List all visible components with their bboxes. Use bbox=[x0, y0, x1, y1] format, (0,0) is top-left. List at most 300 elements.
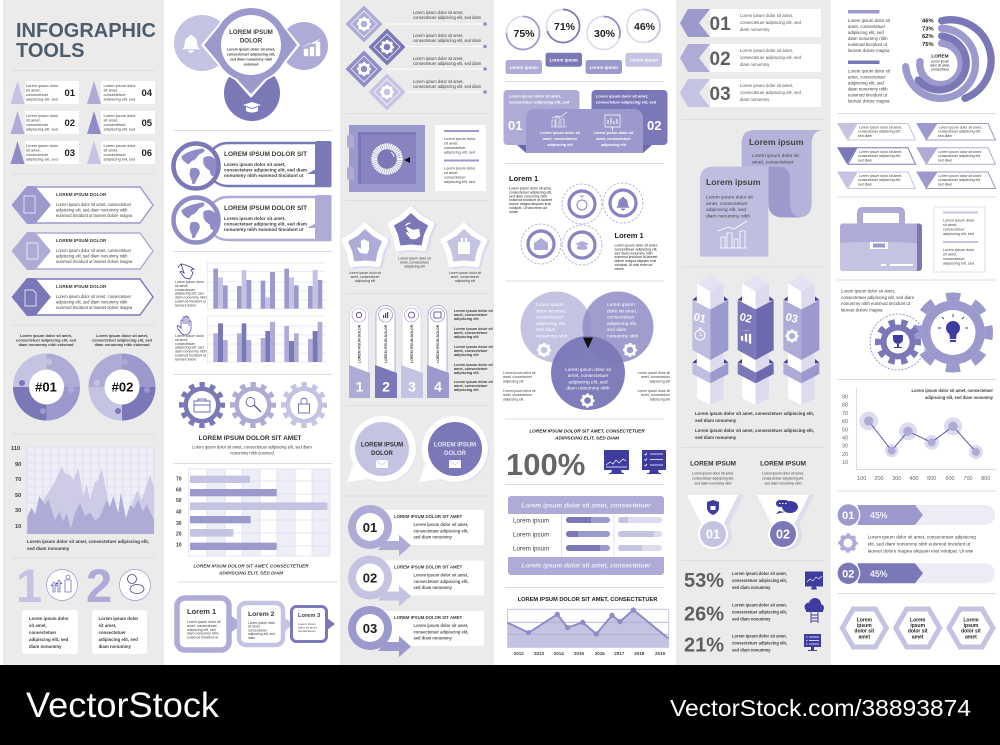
panel: overlapping 01 02 cards: Lorem ipsum dolor sit amet, bbox=[509, 94, 561, 98]
line area chart: 2016 bbox=[595, 651, 605, 656]
panel: dashed icon circles: minim bbox=[509, 210, 518, 214]
globe callout one bbox=[174, 141, 332, 188]
pill four bbox=[427, 306, 449, 398]
panel: three stars: amet, consectetuer bbox=[351, 275, 380, 279]
panel: hexagon arrow list: Lorem ipsum dolor sit amet, consectetuer bbox=[56, 294, 131, 299]
ring arrow 01 bbox=[348, 505, 484, 556]
panel: overlapping 01 02 cards: adipiscing elit bbox=[547, 143, 573, 147]
panel: overlapping 01 02 cards: amet, consectetuer bbox=[543, 137, 578, 141]
panel: angled text tags bbox=[837, 123, 996, 188]
pill four: 4 bbox=[434, 378, 442, 394]
ring arrow 01: consectetuer adipiscing elit, bbox=[414, 528, 469, 533]
panel: hexagon arrow list: euismod tincidunt ut laoreet dolore magna bbox=[56, 259, 133, 264]
panel: isometric columns bbox=[692, 276, 819, 440]
panel: three stars bbox=[344, 209, 487, 283]
text card: Lorem ipsum dolor bbox=[943, 218, 974, 222]
panel: angled text tags: Lorem ipsum dolor sit amet, bbox=[938, 150, 982, 154]
panel: radial bar chart: diam nonummy nibh bbox=[848, 86, 888, 92]
horizontal bar chart: 50 bbox=[176, 498, 182, 504]
panel: hexagon labels bbox=[842, 609, 993, 647]
ring arrow 03: 03 bbox=[363, 621, 377, 636]
panel: three stars: amet, consectetuer bbox=[451, 275, 480, 279]
panel: three circle venn: Lorem ipsum dolor sit bbox=[638, 389, 670, 393]
text card: consectetuer bbox=[943, 257, 965, 261]
ring arrow 03: sed diam nonummy bbox=[414, 636, 453, 641]
panel: three step flow bbox=[177, 598, 335, 650]
panel: hexagon arrow list: LOREM IPSUM DOLOR bbox=[56, 192, 107, 197]
icon: list board bbox=[804, 634, 821, 651]
area chart: sed diam nonummy bbox=[27, 546, 70, 551]
panel: scroll cards: adipiscing elit, sed bbox=[706, 207, 746, 213]
globe callout one: Lorem ipsum dolor sit amet, bbox=[224, 162, 286, 167]
line area chart: 2018 bbox=[634, 651, 645, 656]
text card bbox=[435, 125, 486, 191]
ring arrow 02: sed diam nonummy bbox=[414, 585, 453, 590]
panel: three stars: adipiscing elit bbox=[355, 279, 375, 283]
panel: numbered triangle items: adipiscing elit, sed bbox=[104, 96, 135, 102]
panel: chevron list: Lorem ipsum dolor sit amet, bbox=[740, 13, 793, 18]
ring arrow 01: sed diam nonummy bbox=[414, 535, 453, 540]
panel: angled text tags: sed diam bbox=[858, 158, 872, 162]
progress 02: 02 bbox=[842, 568, 854, 580]
panel: step one and two: 2 bbox=[86, 559, 112, 612]
progress 01: 01 bbox=[842, 510, 854, 522]
panel: angled text tags: consectetuer adipiscing elit, bbox=[938, 130, 981, 134]
panel: percentage statistics: 26% bbox=[684, 604, 724, 626]
panel: four ribbon pills: adipiscing elit bbox=[454, 353, 479, 357]
panel: numbered triangle items: sit amet, bbox=[26, 88, 41, 92]
panel: dashed icon circles: Lorem 1 bbox=[614, 231, 644, 240]
panel: angled text tags: consectetuer adipiscing elit, bbox=[938, 178, 981, 182]
panel: numbered triangle items: Lorem ipsum dolor bbox=[26, 143, 58, 148]
panel: puzzle donuts: consectetuer adipiscing elit, sed bbox=[16, 338, 77, 342]
icon: checklist monitor bbox=[642, 450, 666, 474]
line chart with bubbles: 70 bbox=[842, 411, 848, 417]
panel: three circle venn: adipiscing elit, bbox=[536, 321, 566, 327]
panel: angled text tags: sed diam bbox=[938, 134, 952, 138]
panel: overlapping 01 02 cards: 01 bbox=[508, 118, 522, 133]
panel: isometric columns: 03 bbox=[784, 311, 799, 326]
globe callout one: LOREM IPSUM DOLOR SIT bbox=[224, 151, 307, 158]
panel: overlapping circles: euismod bbox=[244, 62, 258, 66]
panel: numbered triangle items: 03 bbox=[64, 148, 75, 159]
panel: hexagon labels: Lorem bbox=[857, 618, 872, 624]
text card: sit amet, bbox=[444, 142, 458, 146]
panel: three gears: nonummy nibh euismod bbox=[230, 450, 274, 456]
panel: three circle venn: Lorem ipsum bbox=[607, 303, 635, 308]
panel: progress bars: laoreet dolore magna aliquam erat volutpat. Ut wisi bbox=[868, 548, 973, 554]
panel: scroll cards: Lorem ipsum bbox=[706, 177, 761, 187]
panel: percentage statistics: sed diam nonummy bbox=[732, 648, 771, 652]
footer logo: VectorStock bbox=[26, 686, 220, 725]
panel: chevron list bbox=[680, 9, 821, 107]
panel: paired bar charts bbox=[175, 262, 326, 363]
panel: hexagon labels: amet bbox=[965, 634, 977, 640]
panel: numbered triangle items bbox=[10, 81, 155, 164]
panel: four ribbon pills: adipiscing elit bbox=[454, 371, 479, 375]
panel: radial bar chart: Lorem ipsum bbox=[931, 60, 949, 64]
panel: numbered ring arrows bbox=[348, 505, 484, 657]
panel: four ribbon pills: amet, consectetuer bbox=[454, 331, 488, 335]
panel: radial bar chart: euismod tincidunt ut bbox=[848, 42, 888, 47]
table panel: Lorem ipsum bbox=[513, 518, 549, 524]
line chart with bubbles: 700 bbox=[963, 476, 973, 482]
panel: numbered triangle items: Lorem ipsum dolor bbox=[104, 113, 136, 118]
panel: three circle venn: consectetuer bbox=[536, 315, 564, 321]
panel: dashed icon circles: minim bbox=[614, 267, 624, 271]
panel: isometric columns: Lorem ipsum dolor sit amet, consectetuer adipiscing elit, bbox=[695, 428, 814, 433]
panel: 100 percent: ADIPISCING ELIT, SED DIAM bbox=[554, 436, 619, 440]
panel: paired bar charts: sit amet, bbox=[175, 284, 188, 288]
panel: numbered triangle items: adipiscing elit, sed bbox=[26, 96, 58, 102]
panel: speech bubbles bbox=[347, 416, 489, 483]
panel: overlapping 01 02 cards: adipiscing elit bbox=[601, 143, 627, 147]
panel: numbered triangle items: adipiscing elit, sed bbox=[26, 126, 58, 132]
progress 01 bbox=[836, 503, 995, 527]
panel: dashed icon circles: euismod tincidunt ut laoreet bbox=[509, 198, 552, 202]
step box three: consectetuer bbox=[298, 629, 316, 633]
panel: diamond list: consectetuer adipiscing elit, sed diam bbox=[413, 15, 482, 20]
panel: paired bar charts: adipiscing elit, sed bbox=[175, 346, 204, 350]
panel: radial bar chart: amet, consectetuer bbox=[848, 24, 886, 29]
pill one: 1 bbox=[356, 378, 364, 394]
pill four: LOREM IPSUM DOLOR bbox=[436, 324, 440, 363]
panel: three circle venn: amet, consectetuer bbox=[641, 393, 671, 397]
panel: radial bar chart: adipiscing elit, sed bbox=[848, 80, 884, 86]
panel: three stars: Lorem ipsum dolor sit bbox=[349, 271, 381, 275]
globe callout two bbox=[174, 195, 332, 242]
panel: chevron list: consectetuer adipiscing elit, sed bbox=[740, 90, 802, 95]
panel: percentage rings: Lorem ipsum bbox=[510, 65, 538, 70]
panel: step one and two: adipiscing elit, sed bbox=[29, 637, 69, 642]
large gear bbox=[917, 296, 989, 368]
panel: overlapping 01 02 cards: Lorem ipsum dolor sit amet, bbox=[596, 94, 648, 98]
panel: numbered triangle items: sit amet, bbox=[26, 118, 41, 122]
globe callout two: LOREM IPSUM DOLOR SIT bbox=[224, 205, 307, 212]
panel: overlapping 01 02 cards: consectetuer adipiscing elit, sed bbox=[509, 100, 570, 104]
panel: numbered triangle items: 04 bbox=[142, 88, 153, 99]
panel: chevron list: diam nonummy bbox=[740, 27, 770, 32]
panel: dashed icon circles: consectetuer adipiscing elit, bbox=[614, 247, 658, 251]
horizontal bar chart: 10 bbox=[176, 542, 182, 548]
panel: angled text tags: Lorem ipsum dolor sit amet, bbox=[859, 126, 902, 130]
panel: angled text tags: Lorem ipsum dolor sit amet, bbox=[938, 174, 982, 178]
text card: sit amet, bbox=[444, 171, 458, 175]
panel: globe callouts bbox=[174, 141, 332, 242]
panel: funnel badges: consectetuer adipiscing elit, bbox=[692, 476, 734, 480]
panel: progress bars: Lorem ipsum dolor sit amet, consectetuer adipiscing bbox=[868, 534, 976, 540]
panel: paired bar charts: laoreet dolore bbox=[175, 357, 196, 361]
panel: paired bar charts: adipiscing elit, sed bbox=[175, 292, 204, 296]
panel: numbered triangle items: sit amet, bbox=[104, 88, 118, 92]
panel: radial bar chart: dolor sit amet, bbox=[930, 64, 950, 68]
panel: three circle venn: Lorem ipsum dolor sit bbox=[638, 371, 670, 375]
horizontal bar chart: LOREM IPSUM DOLOR SIT AMET, CONSECTETUER bbox=[193, 564, 309, 568]
panel: overlapping circles: DOLOR bbox=[240, 38, 263, 44]
panel: percentage rings: 71% bbox=[554, 21, 576, 33]
panel: dashed icon circles: volutpat. Ut wisi enim ad bbox=[614, 263, 652, 267]
panel: dashed icon circles: Lorem ipsum dolor sit amet, bbox=[509, 186, 552, 190]
panel: percentage statistics: 21% bbox=[684, 634, 724, 656]
icon: cloud ladder bbox=[804, 598, 824, 623]
line chart with bubbles: 80 bbox=[842, 403, 848, 409]
horizontal bar chart: 30 bbox=[176, 521, 182, 527]
panel: percentage rings: Lorem ipsum bbox=[590, 65, 618, 70]
panel: numbered triangle items: Lorem ipsum dolor bbox=[104, 83, 136, 88]
step box three: dolor sit amet, bbox=[298, 626, 318, 630]
panel: step one and two: diam nonummy bbox=[29, 644, 62, 649]
line chart with bubbles: 90 bbox=[842, 395, 848, 401]
ring arrow 01: LOREM IPSUM DOLOR SIT AMET bbox=[394, 514, 462, 519]
panel: three circle venn: adipiscing elit bbox=[503, 397, 523, 401]
panel: hexagon arrow list: Lorem ipsum dolor sit amet, consectetuer bbox=[56, 248, 131, 253]
footer band bbox=[0, 665, 1000, 745]
panel: radial bar chart: amet, consectetuer bbox=[848, 74, 886, 80]
ring arrow 01: Lorem ipsum dolor sit amet, bbox=[414, 522, 468, 527]
panel: numbered triangle items: consectetuer bbox=[104, 122, 126, 127]
panel: four ribbon pills: Lorem ipsum dolor sit bbox=[454, 363, 493, 367]
horizontal bar chart: 70 bbox=[176, 476, 182, 482]
panel: numbered triangle items: adipiscing elit, sed bbox=[26, 156, 58, 162]
line chart with bubbles: 100 bbox=[857, 476, 866, 482]
panel: three circle venn: amet, consectetuer bbox=[503, 375, 533, 379]
panel: three gears: LOREM IPSUM DOLOR SIT AMET bbox=[198, 435, 302, 442]
panel: three circle venn: dolor sit amet, bbox=[607, 308, 637, 314]
step box three bbox=[292, 606, 335, 642]
globe callout two: consectetuer adipiscing elit, sed diam bbox=[224, 221, 307, 226]
line chart with bubbles: 30 bbox=[842, 444, 848, 450]
panel: chevron list: diam nonummy bbox=[740, 97, 770, 102]
panel: diamond list: Lorem ipsum dolor sit amet, bbox=[413, 56, 464, 61]
text card: adipiscing elit, sed bbox=[943, 262, 974, 266]
progress 01: 45% bbox=[870, 510, 888, 520]
panel: four ribbon pills: amet, consectetuer bbox=[454, 313, 488, 317]
panel: overlapping 01 02 cards: consectetuer adipiscing elit, sed bbox=[596, 100, 657, 104]
panel: hexagon labels: ipsum bbox=[857, 623, 872, 629]
horizontal bar chart: 60 bbox=[176, 488, 182, 494]
step box two: sit amet, bbox=[248, 625, 261, 629]
line area chart: 2017 bbox=[614, 651, 625, 656]
panel: three circle venn: Lorem ipsum dolor sit bbox=[565, 368, 611, 373]
step box one: adipiscing elit, sed bbox=[187, 628, 216, 632]
panel: safe bbox=[347, 125, 486, 192]
panel: dashed icon circles: sed diam nonummy nibh bbox=[509, 194, 547, 198]
panel: three circle venn: consectetuer bbox=[607, 315, 635, 321]
panel: three circle venn: adipiscing elit bbox=[650, 397, 670, 401]
panel: hexagon labels: ipsum bbox=[964, 623, 979, 629]
panel: overlapping 01 02 cards: 02 bbox=[647, 118, 661, 133]
panel: step one and two: consectetuer bbox=[29, 630, 57, 635]
progress 02 bbox=[836, 561, 995, 585]
line area chart: 2013 bbox=[534, 651, 545, 656]
panel: scroll cards: diam nonummy nibh bbox=[706, 213, 750, 219]
panel: paired bar charts: euismod tincidunt ut bbox=[175, 354, 206, 358]
panel: angled text tags: sed diam bbox=[858, 182, 872, 186]
panel: puzzle donuts: Lorem ipsum dolor sit amet, bbox=[20, 333, 72, 338]
panel: percentage rings: 46% bbox=[634, 21, 656, 33]
globe callout one: nonummy nibh euismod tincidunt ut bbox=[224, 173, 304, 178]
panel: dashed icon circles: euismod tincidunt ut laoreet bbox=[614, 255, 657, 259]
bubble one: DOLOR bbox=[371, 451, 393, 457]
line area chart: 2014 bbox=[554, 651, 564, 656]
panel: four ribbon pills: amet, consectetuer bbox=[454, 349, 488, 353]
step box three: Lorem 3 bbox=[298, 613, 320, 619]
bubble two: DOLOR bbox=[444, 451, 466, 457]
globe callout two: Lorem ipsum dolor sit amet, bbox=[224, 216, 286, 221]
panel: step one and two: Lorem ipsum dolor bbox=[29, 616, 69, 621]
panel: progress bars: elit, sed diam nonummy nibh euismod tincidunt ut bbox=[868, 542, 971, 546]
panel: hexagon labels: dolor sit bbox=[908, 629, 928, 635]
icon: briefcase bbox=[840, 210, 922, 271]
panel: step one and two: consectetuer bbox=[98, 630, 126, 635]
panel: numbered triangle items: sit amet, bbox=[26, 148, 41, 152]
panel: three circle venn: amet, consectetuer bbox=[503, 393, 533, 397]
panel: radial bar chart: laoreet dolore magna bbox=[848, 48, 890, 53]
panel: hexagon labels: Lorem bbox=[963, 618, 979, 624]
bubble one: LOREM IPSUM bbox=[361, 442, 403, 448]
bubble two: LOREM IPSUM bbox=[434, 442, 476, 448]
panel: numbered triangle items: 06 bbox=[142, 148, 152, 159]
panel: scroll cards: Lorem ipsum dolor sit bbox=[706, 196, 753, 200]
title: TOOLS bbox=[16, 40, 85, 62]
panel: paired bar charts: euismod tincidunt ut bbox=[175, 300, 206, 304]
panel: overlapping circles bbox=[174, 6, 328, 121]
panel: four ribbon pills: Lorem ipsum dolor sit bbox=[454, 309, 493, 313]
panel: radial bar chart: adipiscing elit, sed bbox=[848, 30, 884, 35]
area chart bbox=[11, 446, 154, 551]
panel: angled text tags: consectetuer adipiscing elit, bbox=[938, 154, 981, 158]
panel: numbered triangle items: sit amet, bbox=[104, 118, 118, 122]
panel: scroll cards bbox=[700, 130, 822, 257]
panel: paired bar charts: laoreet dolore bbox=[175, 303, 196, 307]
panel: funnel badges: Lorem ipsum dolor sit amet, bbox=[762, 472, 804, 476]
panel: four ribbon pills: amet, consectetuer bbox=[454, 384, 488, 388]
badge 02: 02 bbox=[776, 528, 790, 542]
panel: hexagon arrow list: LOREM IPSUM DOLOR bbox=[56, 238, 107, 243]
panel: progress bars bbox=[836, 503, 995, 585]
panel: angled text tags: sed diam bbox=[938, 158, 952, 162]
panel: isometric columns: sed diam nonummy bbox=[695, 418, 737, 423]
line area chart: LOREM IPSUM DOLOR SIT AMET, CONSECTETUER bbox=[518, 597, 657, 603]
text card: sit amet, bbox=[943, 223, 957, 227]
panel: puzzle donuts bbox=[13, 333, 156, 420]
panel: angled text tags: Lorem ipsum dolor sit amet, bbox=[859, 150, 902, 154]
horizontal bar chart bbox=[176, 468, 330, 576]
panel: radial bar chart: laoreet dolore magna bbox=[848, 98, 890, 104]
panel: diamond list: consectetuer adipiscing elit, sed diam bbox=[413, 38, 482, 43]
small gear bbox=[878, 322, 918, 362]
area chart: 70 bbox=[15, 477, 21, 483]
panel: percentage statistics: 53% bbox=[684, 570, 724, 592]
panel: dashed icon circles: volutpat. Ut wisi enim ad bbox=[509, 206, 547, 210]
panel: numbered triangle items: 02 bbox=[64, 118, 75, 129]
text card: Lorem ipsum dolor bbox=[444, 137, 475, 141]
panel: numbered triangle items: consectetuer bbox=[26, 92, 49, 97]
panel: overlapping circles: Lorem ipsum dolor sit amet, bbox=[227, 48, 275, 52]
panel: paired bar charts: consectetuer bbox=[175, 342, 196, 346]
panel: chevron list: consectetuer adipiscing elit, sed bbox=[740, 20, 802, 25]
panel: funnel badges bbox=[687, 460, 814, 550]
panel: four ribbon pills: adipiscing elit bbox=[454, 335, 479, 339]
panel: step one and two: 1 bbox=[16, 559, 42, 612]
radial arcs bbox=[906, 20, 991, 98]
panel: scroll cards: Lorem ipsum bbox=[749, 137, 804, 147]
area chart: 90 bbox=[15, 462, 21, 468]
panel: radial bar chart: 73% bbox=[922, 26, 934, 32]
horizontal bar chart: ADIPISCING ELIT, SED DIAM bbox=[218, 570, 283, 576]
panel: hexagon labels: amet bbox=[912, 634, 924, 640]
step box one: Lorem ipsum dolor sit bbox=[187, 620, 220, 624]
line chart with bubbles: 20 bbox=[842, 452, 848, 458]
panel: puzzle donuts: consectetuer adipiscing elit, sed bbox=[92, 338, 153, 342]
panel: three stars: Lorem ipsum dolor sit bbox=[449, 271, 481, 275]
line area chart bbox=[507, 597, 669, 656]
line chart with bubbles bbox=[842, 388, 996, 482]
line chart with bubbles: 200 bbox=[874, 476, 884, 482]
panel: hexagon labels: ipsum bbox=[910, 623, 926, 629]
panel: numbered triangle items: consectetuer bbox=[26, 152, 49, 157]
table panel: Lorem ipsum bbox=[513, 532, 549, 538]
panel: four ribbon pills: Lorem ipsum dolor sit bbox=[454, 345, 493, 349]
pill three bbox=[401, 306, 423, 398]
icon: safe bbox=[347, 125, 425, 192]
panel: three circle venn: adipiscing elit, sed bbox=[568, 379, 608, 385]
horizontal bar chart: 40 bbox=[176, 510, 182, 516]
panel: dashed icon circles: Lorem 1 bbox=[509, 174, 538, 183]
donut #01 bbox=[13, 354, 80, 420]
text card: consectetuer bbox=[444, 146, 466, 150]
pill two: LOREM IPSUM DOLOR bbox=[384, 324, 388, 363]
panel: chevron list: diam nonummy bbox=[740, 62, 770, 67]
panel: dashed icon circles: dolore magna aliquam erat bbox=[509, 202, 551, 206]
panel: three circle venn: sed diam bbox=[536, 327, 555, 333]
panel: hexagon labels: dolor sit bbox=[961, 629, 981, 635]
panel: three stars: adipiscing elit bbox=[455, 279, 475, 283]
panel: overlapping 01 02 cards bbox=[504, 90, 668, 153]
panel: funnel badges: LOREM IPSUM bbox=[690, 460, 736, 468]
line chart with bubbles: 400 bbox=[909, 476, 919, 482]
panel: percentage statistics: Lorem ipsum dolor sit amet, bbox=[732, 571, 787, 576]
panel: chevron list: Lorem ipsum dolor sit amet, bbox=[740, 48, 793, 53]
table panel: Lorem ipsum dolor sit amet, consectetuer bbox=[521, 502, 651, 510]
panel: 100 percent bbox=[506, 428, 666, 482]
panel: step one and two: sit amet, bbox=[98, 623, 116, 628]
area chart: Lorem ipsum dolor sit amet, consectetuer adipiscing elit, bbox=[27, 539, 149, 544]
panel: three circle venn bbox=[503, 292, 671, 410]
panel: hexagon labels: Lorem bbox=[910, 618, 925, 624]
panel: three circle venn: Lorem ipsum dolor sit bbox=[503, 371, 535, 375]
step box three: Lorem ipsum bbox=[298, 622, 316, 626]
panel: three circle venn: adipiscing elit, bbox=[607, 321, 637, 327]
panel: paired bar charts: Lorem ipsum dolor bbox=[175, 280, 204, 284]
step box one: Lorem 1 bbox=[187, 607, 216, 616]
line chart with bubbles: 800 bbox=[981, 476, 990, 482]
panel: numbered triangle items: consectetuer bbox=[104, 92, 126, 97]
step box one bbox=[177, 598, 243, 650]
step box two: adipiscing elit, sed bbox=[248, 632, 275, 636]
panel: three circle venn: nonummy nibh bbox=[536, 334, 568, 340]
panel: paired bar charts: diam nonummy nibh bbox=[175, 350, 207, 354]
panel: funnel badges: consectetuer adipiscing elit, bbox=[762, 476, 804, 480]
panel: scroll cards: amet, consectetuer bbox=[752, 159, 794, 165]
line chart with bubbles: 300 bbox=[892, 476, 901, 482]
panel: chevron list: 03 bbox=[710, 84, 731, 105]
panel: puzzle donuts: Lorem ipsum dolor sit amet, bbox=[96, 333, 148, 338]
line chart with bubbles: 10 bbox=[842, 460, 848, 466]
panel: hexagon arrow list: Lorem ipsum dolor sit amet, consectetuer bbox=[56, 202, 131, 207]
panel: paired bar charts: consectetuer bbox=[175, 288, 196, 292]
donut #01: #01 bbox=[35, 380, 57, 394]
